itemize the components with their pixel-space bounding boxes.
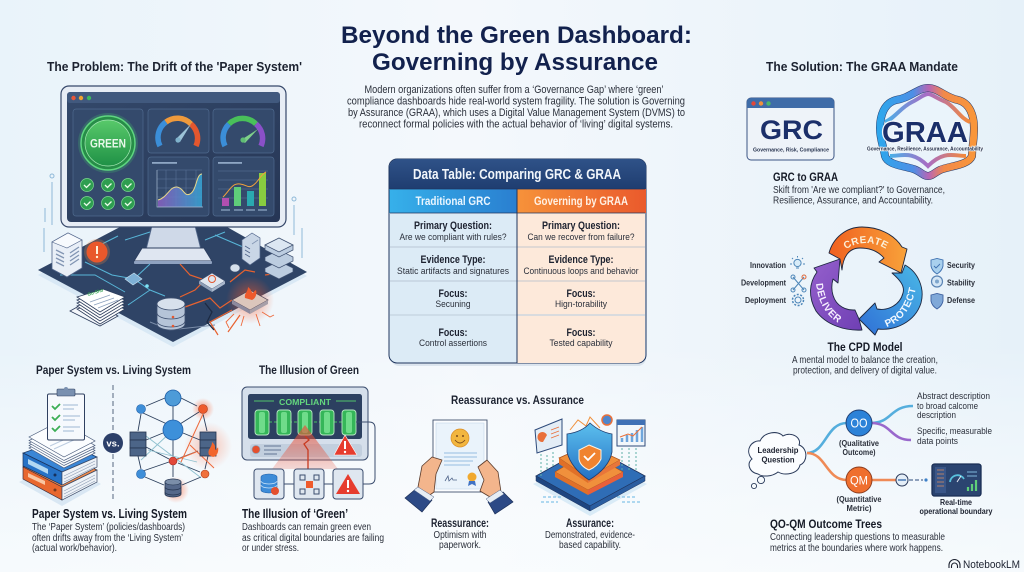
blue binder bbox=[23, 440, 97, 485]
list: CPD left labels bbox=[741, 260, 786, 305]
connectors bbox=[807, 406, 913, 480]
title bbox=[341, 22, 692, 76]
text: illusion of green: as critical digital boundaries are failing bbox=[242, 533, 384, 544]
area chart bbox=[148, 157, 209, 216]
box: alert bbox=[333, 469, 363, 499]
text: CPD model: A mental model to balance the creation, bbox=[792, 355, 938, 366]
row: focus one: Secuning bbox=[436, 299, 470, 310]
orange layers bbox=[555, 445, 623, 495]
CPD cycle diagram bbox=[810, 226, 923, 336]
text: CPD model bbox=[792, 340, 938, 376]
text: outcome trees: QO-QM Outcome Trees bbox=[770, 517, 882, 531]
text: CPD model: protection, and delivery of digital value. bbox=[793, 366, 937, 376]
text: illusion of green: or under stress. bbox=[242, 543, 299, 554]
thought cloud: Question bbox=[762, 454, 794, 464]
server right bbox=[242, 233, 260, 265]
list: CPD left labels: Deployment bbox=[745, 295, 786, 305]
text: illusion of green: Dashboards can remain green even bbox=[242, 522, 371, 533]
illustration: monitor on circuit platform bbox=[38, 86, 307, 347]
intro paragraph: compliance dashboards hide real-world system fragility. The solution is Governing bbox=[347, 96, 685, 108]
text: GRC to GRAA: Skift from 'Are we compliant?' to Governance, bbox=[773, 185, 945, 196]
list: CPD right labels bbox=[947, 260, 975, 305]
node: OO: OO bbox=[850, 416, 868, 430]
alert badge bbox=[84, 239, 110, 265]
icons: CPD left bbox=[790, 256, 806, 306]
text: outcome trees bbox=[770, 517, 945, 554]
data table bbox=[389, 159, 646, 366]
server left bbox=[52, 233, 82, 277]
window left bbox=[535, 419, 562, 453]
row: focus one: Hign-torability bbox=[555, 299, 607, 310]
monitor screen bbox=[67, 92, 280, 222]
paper stack bbox=[70, 287, 125, 326]
heading: reassurance vs assurance: Reassurance vs. Assurance bbox=[451, 395, 584, 407]
text: assurance: Assurance: bbox=[566, 518, 614, 530]
node: OO: (Qualitative bbox=[839, 439, 879, 448]
icon: GRC window: GRC bbox=[760, 115, 823, 145]
intro paragraph: reconnect formal policies with the actual behavior of ‘living’ digital systems. bbox=[359, 118, 673, 130]
text: OO branch notes: description bbox=[917, 409, 956, 420]
text: assurance: based capability. bbox=[559, 540, 621, 551]
text: outcome trees: metrics at the boundaries where work happens. bbox=[770, 543, 943, 554]
boundary connector bbox=[896, 474, 928, 486]
list: CPD left labels: Development bbox=[741, 278, 786, 288]
text: paper vs living: Paper System vs. Living System bbox=[32, 506, 187, 521]
server stack bbox=[265, 238, 293, 279]
text: OO branch notes: data points bbox=[917, 435, 958, 446]
left hand bbox=[405, 457, 442, 512]
text: OO branch notes bbox=[917, 390, 992, 446]
vs divider: vs. bbox=[106, 438, 120, 450]
column: traditional GRC header bbox=[390, 189, 517, 213]
text: reassurance: Optimism with bbox=[434, 530, 486, 541]
text: paper vs living: (actual work/behavior). bbox=[32, 543, 117, 554]
orange binder bbox=[23, 452, 97, 500]
row: evidence type: Static artifacts and signatures bbox=[397, 266, 509, 277]
illustration: certificate in hands bbox=[405, 420, 513, 514]
circuit platform bbox=[38, 227, 307, 347]
row: focus two bbox=[419, 327, 613, 349]
row: focus two: Focus: bbox=[566, 327, 596, 339]
gear bbox=[602, 415, 612, 425]
node: QM bbox=[836, 467, 882, 513]
clipboard bbox=[48, 387, 84, 440]
outcome tree diagram bbox=[749, 390, 993, 516]
row: evidence type: Evidence Type: bbox=[548, 254, 614, 266]
database bbox=[157, 298, 185, 330]
text: CPD model: The CPD Model bbox=[828, 340, 902, 354]
text: outcome trees: Connecting leadership questions to measurable bbox=[770, 532, 945, 543]
warning triangle bbox=[334, 435, 357, 455]
row: evidence type: Continuous loops and behavior bbox=[524, 266, 639, 277]
chip bbox=[125, 273, 142, 285]
network: living system bbox=[130, 390, 232, 503]
paper sheets bbox=[29, 421, 95, 468]
illustration: assurance shield platform bbox=[533, 415, 647, 516]
icon: GRC window: Governance, Risk, Compliance bbox=[753, 148, 829, 154]
node: QM: (Quantitative bbox=[836, 495, 882, 504]
row: focus one bbox=[436, 288, 607, 310]
text: assurance bbox=[545, 518, 635, 551]
row: primary question: Can we recover from failure? bbox=[528, 232, 634, 243]
intro paragraph bbox=[347, 84, 685, 130]
node: QM: QM bbox=[850, 474, 868, 488]
node: OO: Outcome) bbox=[842, 448, 876, 457]
table title: Data Table: Comparing GRC & GRAA bbox=[413, 167, 621, 183]
left status panel: GREEN bbox=[90, 138, 126, 150]
icons: CPD right bbox=[931, 258, 943, 309]
title: Governing by Assurance bbox=[372, 49, 658, 76]
text: boundary caption: operational boundary bbox=[920, 507, 993, 516]
row: focus two: Focus: bbox=[438, 327, 468, 339]
row: evidence type: Evidence Type: bbox=[420, 254, 486, 266]
node: QM: Metric) bbox=[846, 504, 872, 513]
monitor stand bbox=[134, 226, 212, 264]
heading: the problem: The Problem: The Drift of the 'Paper System' bbox=[47, 60, 302, 74]
text: boundary caption bbox=[920, 498, 993, 516]
row: primary question bbox=[400, 220, 634, 243]
illustration: compliant panel bbox=[242, 387, 375, 499]
table body bbox=[389, 159, 646, 363]
text: reassurance: Reassurance: bbox=[431, 518, 489, 530]
thought cloud: Leadership bbox=[758, 445, 798, 455]
right hand bbox=[478, 460, 513, 514]
vs divider bbox=[103, 385, 123, 502]
arrow: create: CREATE bbox=[844, 236, 888, 249]
compliant label: COMPLIANT bbox=[279, 397, 332, 407]
heading: illusion of green: The Illusion of Green bbox=[259, 365, 359, 377]
row: focus two: Control assertions bbox=[419, 338, 487, 349]
table title bbox=[390, 159, 646, 189]
node: OO bbox=[839, 410, 879, 457]
green indicators bbox=[255, 410, 356, 435]
gauge one bbox=[148, 109, 209, 153]
arrow: deliver: DELIVER bbox=[816, 283, 841, 323]
text: reassurance bbox=[431, 518, 489, 551]
arrow: protect: PROTECT bbox=[884, 287, 916, 327]
text: GRC to GRAA: Resilience, Assurance, and Accountability. bbox=[773, 196, 933, 206]
icon: GRAA ring bbox=[867, 88, 984, 176]
failing node with flames bbox=[226, 276, 274, 328]
certificate bbox=[433, 420, 487, 492]
list: CPD right labels: Security bbox=[947, 260, 975, 270]
router chip bbox=[199, 264, 240, 292]
text: illusion of green: The Illusion of ‘Green’ bbox=[242, 506, 348, 521]
icon: GRAA ring: GRAA bbox=[882, 117, 968, 149]
text: reassurance: paperwork. bbox=[439, 540, 481, 551]
heading: paper vs living: Paper System vs. Living System bbox=[36, 365, 191, 377]
base platform bbox=[533, 446, 647, 516]
text: OO branch notes: Specific, measurable bbox=[917, 425, 992, 436]
text: assurance: Demonstrated, evidence- bbox=[545, 530, 635, 541]
column: traditional GRC header: Traditional GRC bbox=[416, 196, 490, 208]
box: database bbox=[254, 469, 284, 499]
column: GRAA header: Governing by GRAA bbox=[534, 196, 628, 208]
thought cloud bbox=[749, 433, 806, 489]
illustration: paper stack and binders bbox=[19, 387, 101, 506]
row: focus two: Tested capability bbox=[550, 338, 613, 349]
left status panel bbox=[73, 109, 143, 216]
text: illusion of green bbox=[242, 506, 384, 554]
paper stack: Go-Sho bbox=[87, 287, 104, 297]
text: boundary caption: Real-time bbox=[940, 498, 972, 507]
text: OO branch notes: Abstract description bbox=[917, 390, 990, 401]
list: CPD right labels: Stability bbox=[947, 278, 975, 288]
column: GRAA header bbox=[517, 189, 646, 213]
text: paper vs living: The ‘Paper System’ (policies/dashboards) bbox=[32, 522, 185, 533]
row: primary question: Primary Question: bbox=[542, 220, 620, 232]
connector lines bbox=[284, 422, 375, 484]
trend line bbox=[570, 417, 600, 430]
box: network bbox=[294, 469, 324, 499]
data streams bbox=[541, 448, 636, 476]
text: paper vs living: often drifts away from the ‘Living System’ bbox=[32, 533, 183, 544]
watermark: NotebookLM: NotebookLM bbox=[963, 559, 1020, 571]
decorative pins bbox=[44, 174, 302, 258]
text: paper vs living bbox=[32, 506, 187, 554]
text: OO branch notes: to broad calcome bbox=[917, 400, 978, 411]
row: focus one: Focus: bbox=[438, 288, 468, 300]
list: CPD right labels: Defense bbox=[947, 295, 975, 305]
intro paragraph: by Assurance (GRAA), which uses a Digital Value Management System (DVMS) to bbox=[348, 107, 685, 119]
mini dashboard bbox=[932, 464, 981, 496]
row: primary question: Are we compliant with rules? bbox=[400, 232, 506, 243]
intro paragraph: Modern organizations often suffer from a ‘Governance Gap’ where ‘green’ bbox=[364, 84, 664, 96]
heading: the solution: The Solution: The GRAA Mandate bbox=[766, 60, 958, 74]
red beam bbox=[272, 425, 338, 469]
shield bbox=[567, 423, 612, 480]
icon: GRAA ring: Governance, Resilience, Assurance, Accountability bbox=[867, 146, 984, 152]
row: primary question: Primary Question: bbox=[414, 220, 492, 232]
window right bbox=[617, 420, 645, 446]
status strip bbox=[250, 444, 362, 457]
row: evidence type bbox=[397, 254, 639, 277]
text: GRC to GRAA: GRC to GRAA bbox=[773, 170, 838, 184]
row: focus one: Focus: bbox=[566, 288, 596, 300]
monitor bezel bbox=[61, 86, 286, 227]
bar chart bbox=[213, 157, 274, 216]
gauge two bbox=[213, 109, 274, 153]
list: CPD left labels: Innovation bbox=[750, 260, 786, 270]
icon: GRC window bbox=[747, 98, 834, 160]
text: GRC to GRAA bbox=[773, 170, 945, 206]
title: Beyond the Green Dashboard: bbox=[341, 22, 692, 49]
